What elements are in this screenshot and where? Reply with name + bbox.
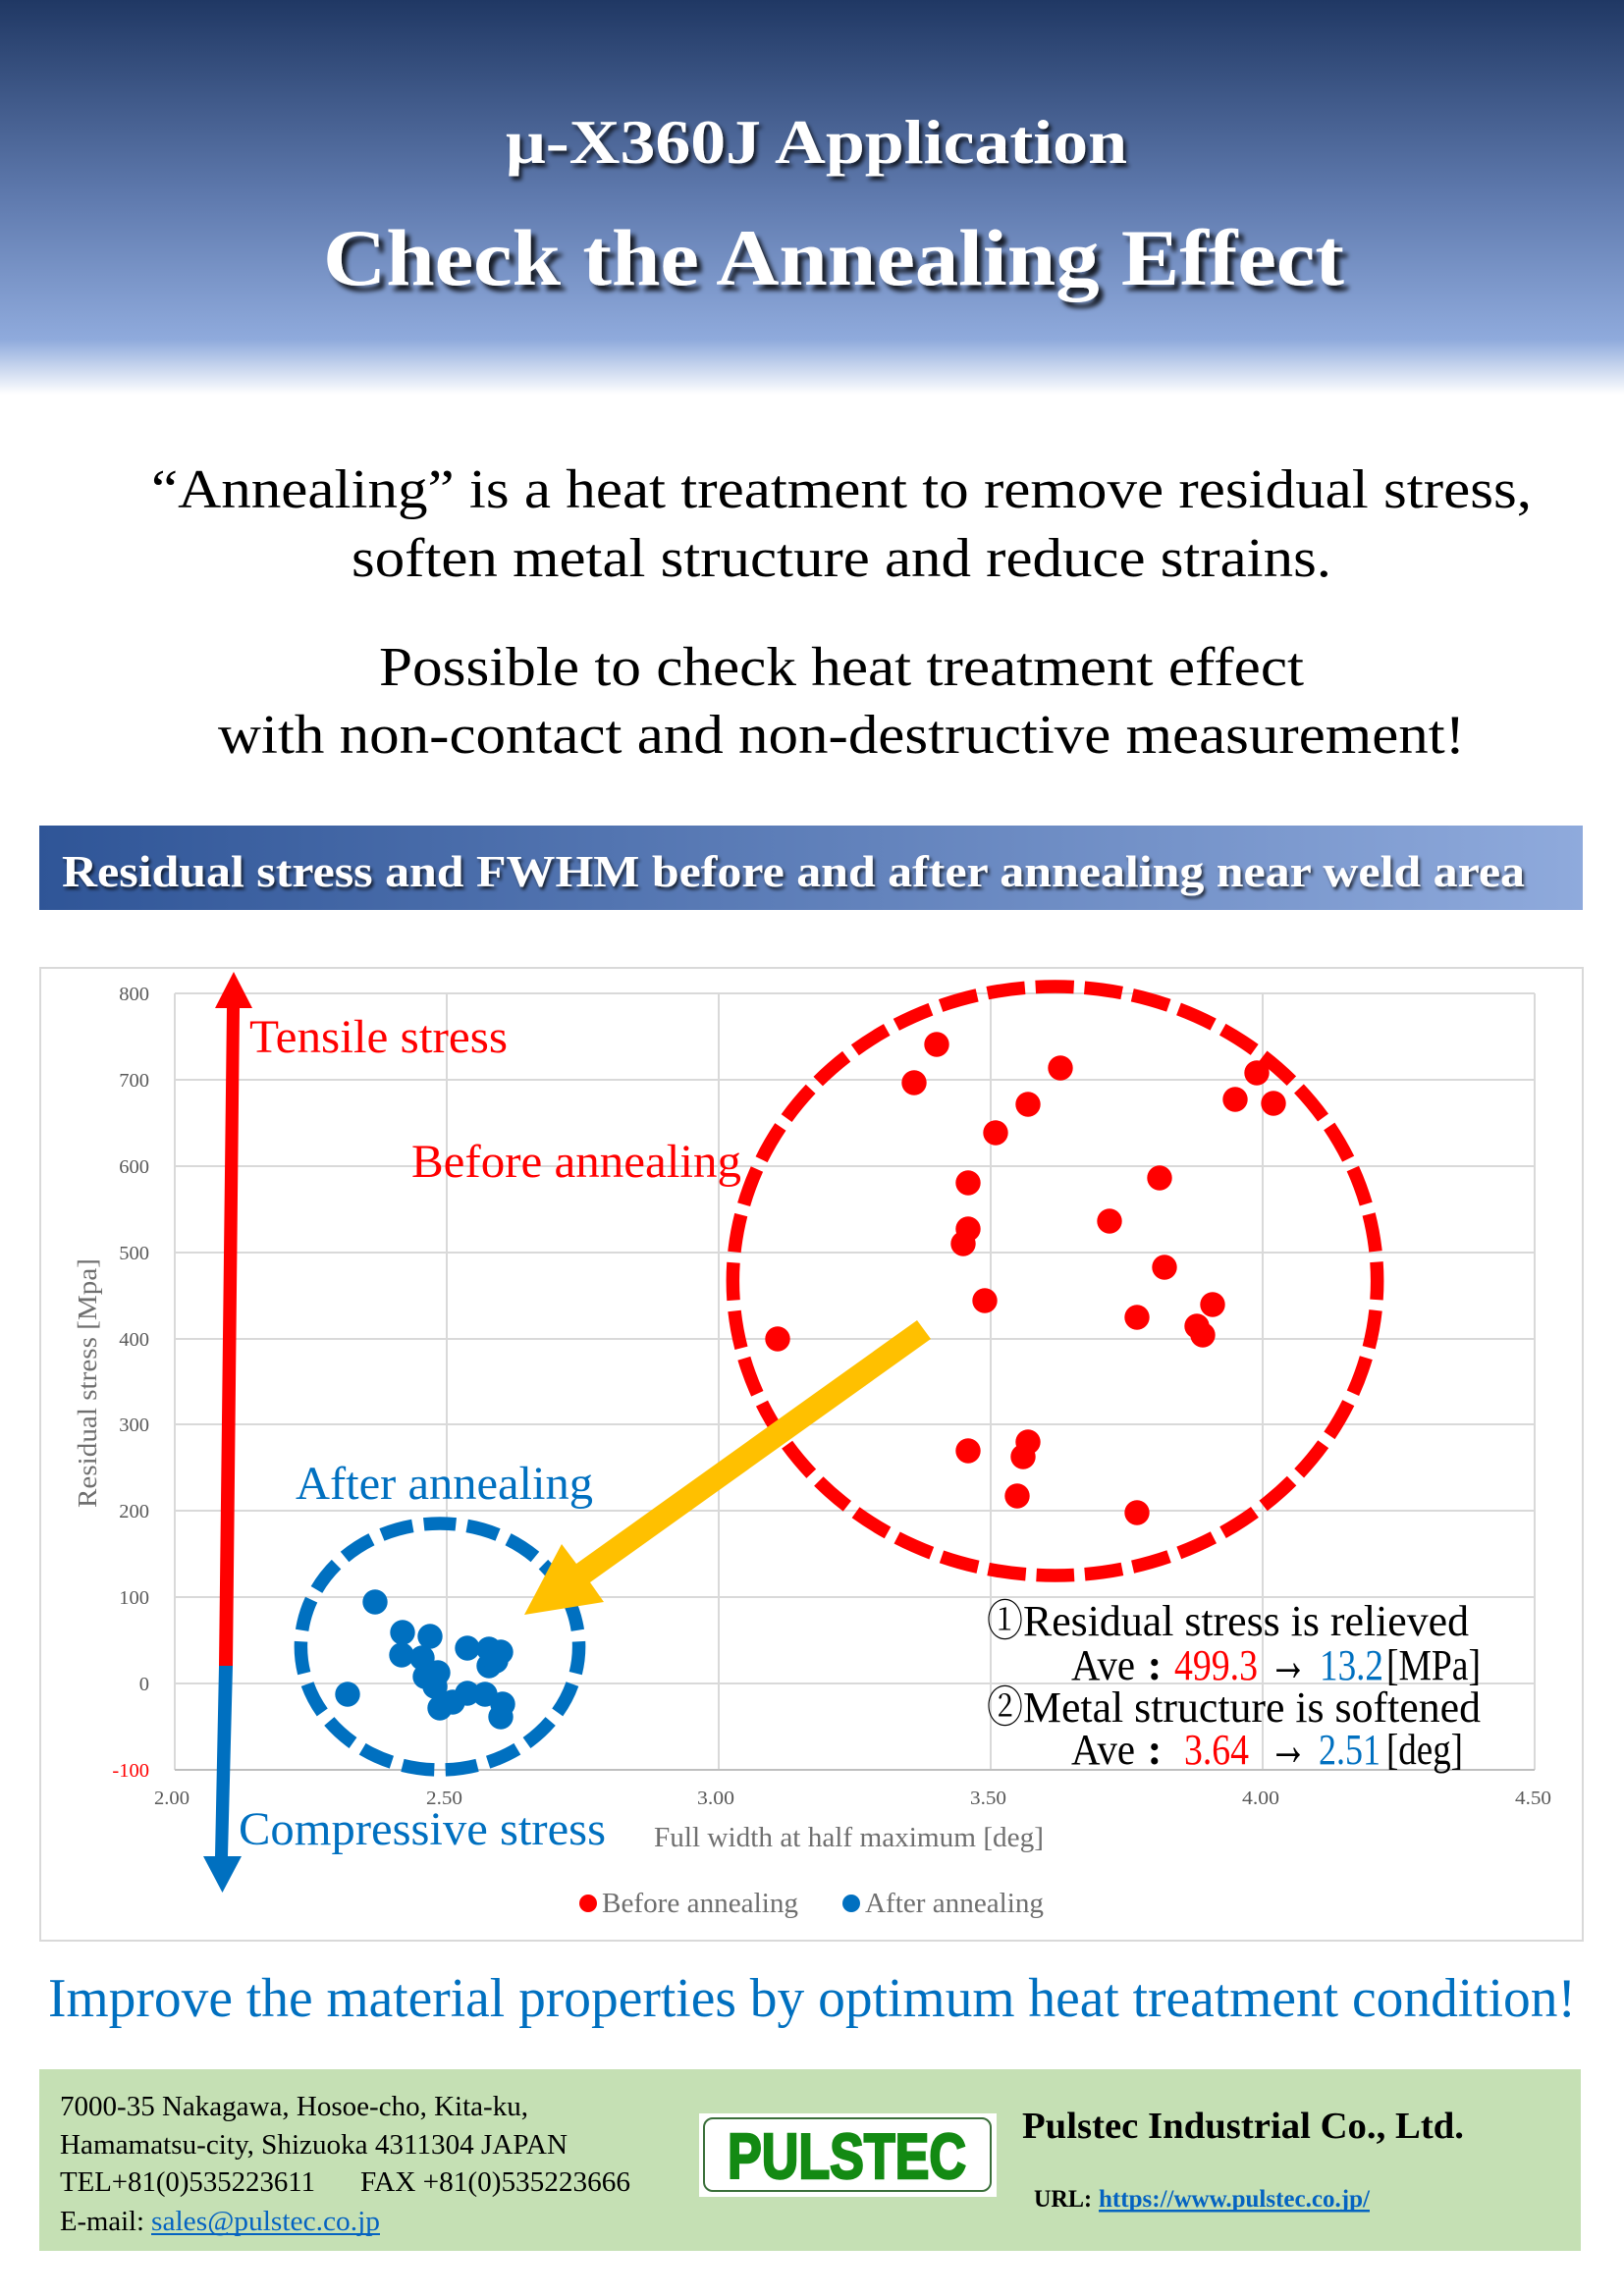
title: main heading: Check the Annealing Effect bbox=[323, 213, 1344, 302]
section heading band bbox=[39, 826, 1583, 910]
intro text block: with non-contact and non-destructive measurement! bbox=[218, 705, 1465, 766]
address block bbox=[60, 2092, 630, 2237]
data points: before annealing bbox=[765, 1032, 1286, 1525]
y axis tick labels: 800 bbox=[119, 984, 149, 1005]
label: before annealing: Before annealing bbox=[411, 1136, 741, 1188]
website url: URL: bbox=[1034, 2186, 1092, 2213]
callout: results summary: ② bbox=[987, 1683, 1023, 1732]
panel: footer bbox=[39, 2069, 1581, 2251]
address block: sales@pulstec.co.jp bbox=[151, 2207, 380, 2237]
logo: Pulstec: PULSTEC bbox=[728, 2120, 966, 2192]
address block: FAX +81(0)535223666 bbox=[360, 2167, 630, 2198]
address block: E-mail: bbox=[60, 2207, 144, 2237]
callout: results summary: : bbox=[1148, 1641, 1162, 1689]
callout: results summary: [deg] bbox=[1386, 1726, 1463, 1774]
callout: results summary: → bbox=[1269, 1628, 1308, 1694]
legend bbox=[579, 1889, 1044, 1919]
y axis title: Residual stress [Mpa] bbox=[73, 1258, 102, 1508]
label: compressive stress: Compressive stress bbox=[239, 1803, 606, 1855]
callout: results summary: 13.2 bbox=[1320, 1641, 1383, 1689]
legend: After annealing bbox=[865, 1889, 1044, 1919]
y axis tick labels: 200 bbox=[119, 1501, 149, 1522]
callout: results summary: Ave bbox=[1071, 1726, 1135, 1774]
x axis tick labels bbox=[154, 1788, 1551, 1809]
address block: 7000-35 Nakagawa, Hosoe-cho, Kita-ku, bbox=[60, 2092, 528, 2122]
dashed ellipse: after annealing cluster bbox=[300, 1523, 579, 1770]
intro text block bbox=[151, 459, 1532, 766]
data points: after annealing bbox=[335, 1589, 515, 1730]
y axis tick labels: -100 bbox=[112, 1760, 149, 1782]
y axis tick labels: 700 bbox=[119, 1070, 149, 1092]
y axis tick labels: 400 bbox=[119, 1329, 149, 1351]
y axis tick labels bbox=[112, 984, 149, 1782]
callout: results summary: Residual stress is relieved bbox=[1023, 1597, 1469, 1645]
company name: Pulstec Industrial Co., Ltd. bbox=[1022, 2106, 1464, 2147]
arrow: compressive stress (down) bbox=[203, 1666, 242, 1893]
legend: Before annealing bbox=[602, 1889, 798, 1919]
y axis tick labels: 600 bbox=[119, 1156, 149, 1178]
x axis tick labels: 4.50 bbox=[1515, 1788, 1551, 1809]
section heading band: Residual stress and FWHM before and after annealing near weld area bbox=[62, 846, 1525, 896]
y axis tick labels: 300 bbox=[119, 1415, 149, 1436]
panel: scatter chart bbox=[40, 968, 1583, 1941]
callout: results summary: Ave bbox=[1071, 1641, 1135, 1689]
callout: results summary bbox=[987, 1597, 1481, 1779]
callout: results summary: [MPa] bbox=[1386, 1641, 1481, 1689]
address block: TEL+81(0)535223611 bbox=[60, 2167, 315, 2198]
website url: https://www.pulstec.co.jp/ bbox=[1099, 2186, 1371, 2213]
intro text block: Possible to check heat treatment effect bbox=[379, 637, 1304, 698]
title: application name: μ-X360J Application bbox=[506, 107, 1127, 177]
label: tensile stress: Tensile stress bbox=[249, 1011, 508, 1063]
slogan: Improve the material properties by optimum heat treatment condition! bbox=[48, 1968, 1576, 2029]
arrow: tensile stress (up) bbox=[215, 972, 252, 1666]
x axis title: Full width at half maximum [deg] bbox=[654, 1823, 1044, 1853]
label: after annealing: After annealing bbox=[296, 1458, 593, 1510]
y axis tick labels: 0 bbox=[139, 1674, 149, 1695]
callout: results summary: ① bbox=[987, 1597, 1023, 1645]
address block: Hamamatsu-city, Shizuoka 4311304 JAPAN bbox=[60, 2130, 568, 2161]
intro text block: soften metal structure and reduce strains. bbox=[352, 528, 1331, 589]
intro text block: “Annealing” is a heat treatment to remove residual stress, bbox=[151, 459, 1532, 520]
y axis tick labels: 100 bbox=[119, 1587, 149, 1609]
header banner bbox=[0, 0, 1624, 395]
callout: results summary: → bbox=[1269, 1712, 1308, 1779]
x axis tick labels: 3.00 bbox=[697, 1788, 734, 1809]
x axis tick labels: 4.00 bbox=[1242, 1788, 1279, 1809]
callout: results summary: 2.51 bbox=[1319, 1726, 1380, 1774]
x axis tick labels: 3.50 bbox=[970, 1788, 1006, 1809]
callout: results summary: : bbox=[1148, 1726, 1162, 1774]
x axis tick labels: 2.50 bbox=[426, 1788, 462, 1809]
callout: results summary: Metal structure is softened bbox=[1023, 1683, 1481, 1732]
y axis tick labels: 500 bbox=[119, 1243, 149, 1264]
dashed ellipse: before annealing cluster bbox=[732, 987, 1378, 1575]
callout: results summary: 3.64 bbox=[1184, 1726, 1249, 1774]
arrow: before to after annealing bbox=[524, 1320, 931, 1615]
callout: results summary: 499.3 bbox=[1174, 1641, 1258, 1689]
x axis tick labels: 2.00 bbox=[154, 1788, 189, 1809]
